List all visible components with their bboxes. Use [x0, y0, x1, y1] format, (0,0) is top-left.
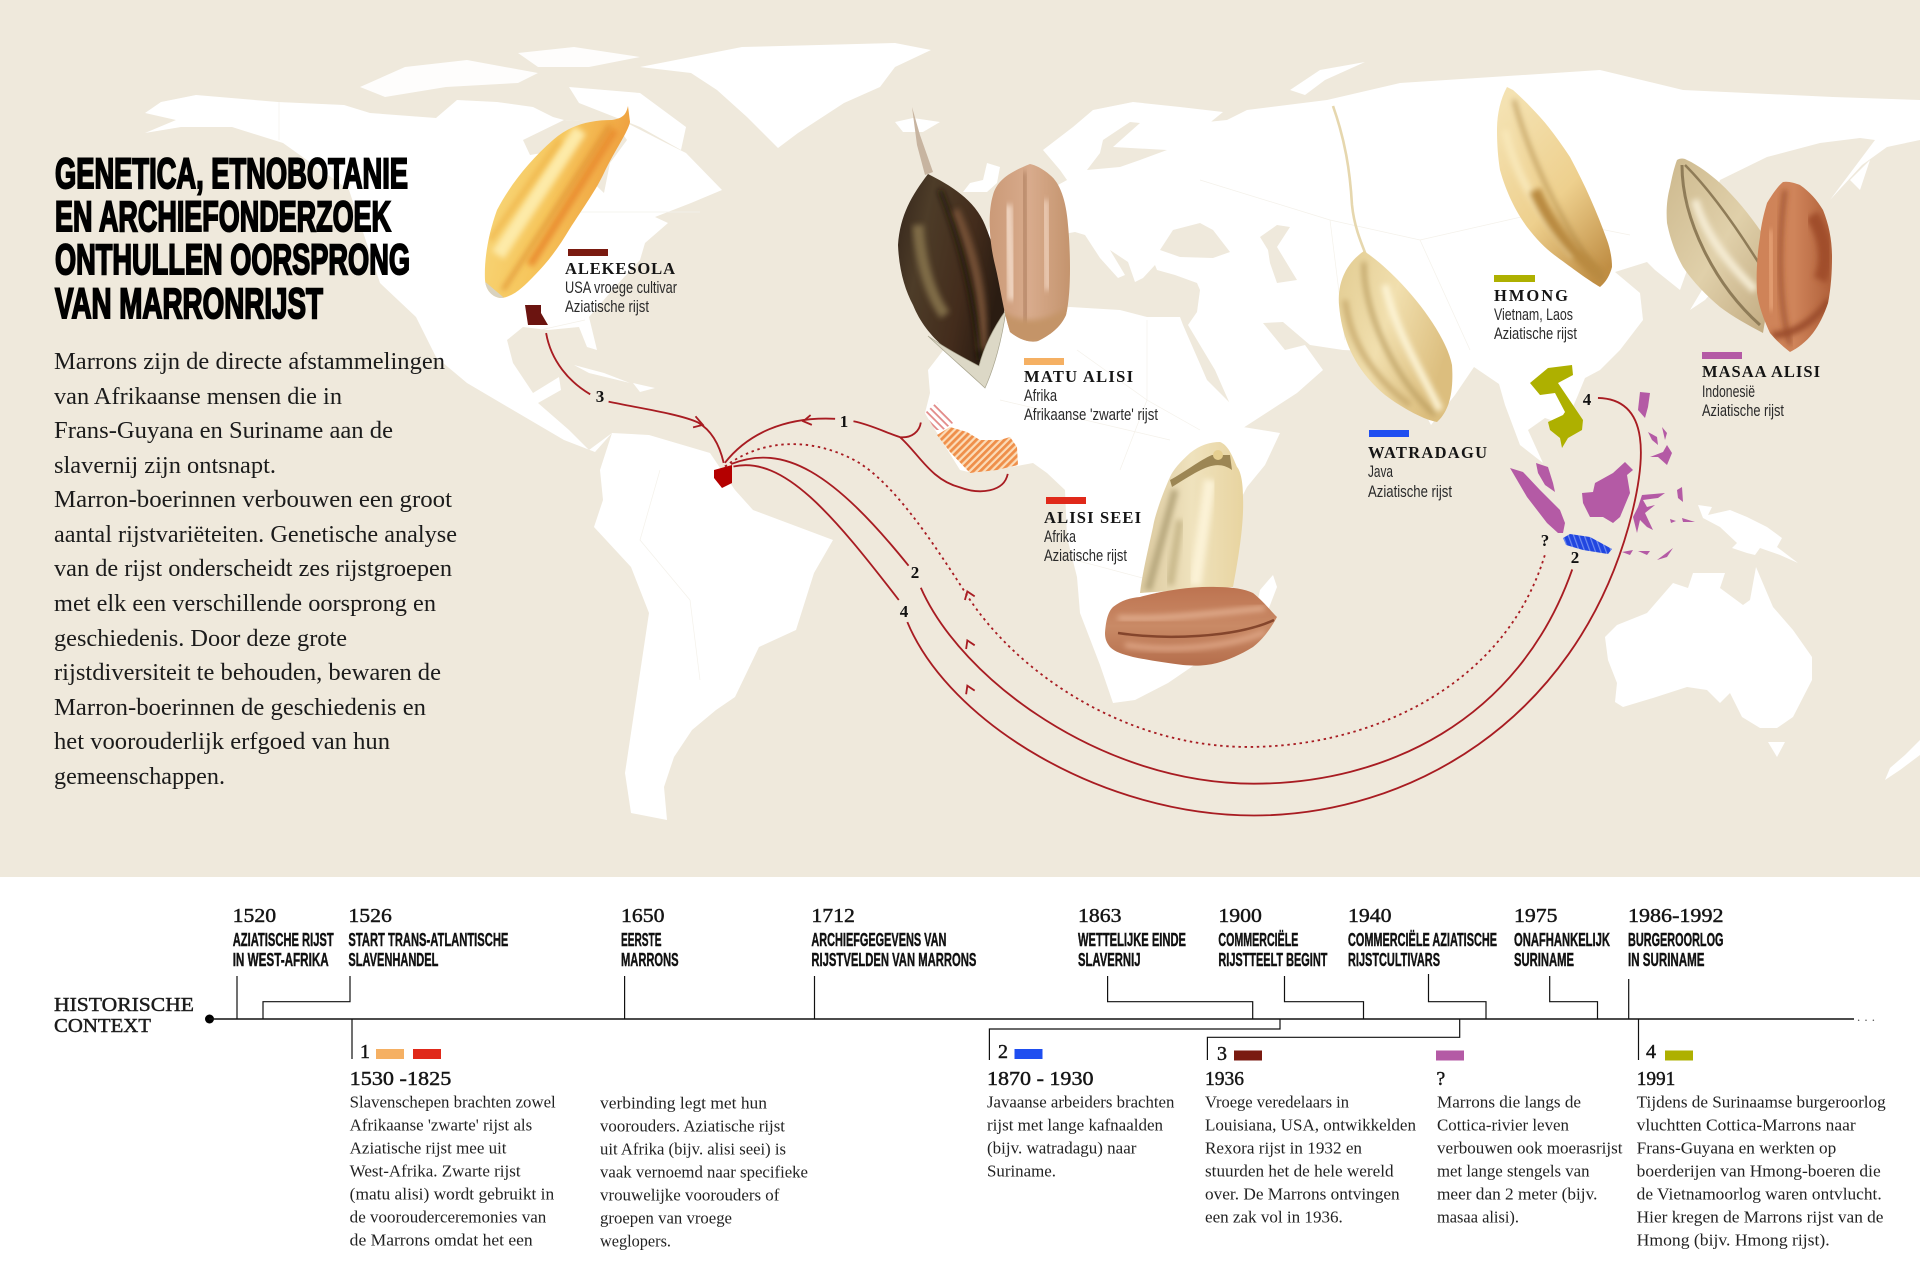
detail 1: 1530-1825: Slavenschepen brachten zowel	[350, 1093, 556, 1112]
event 1863: SLAVERNIJ	[1078, 949, 1140, 970]
intro text: Marron-boerinnen de geschiedenis en	[54, 694, 426, 721]
British Isles	[963, 163, 1000, 192]
title: GENETICA, ETNOBOTANIE	[55, 150, 408, 198]
detail 4: 1991: vluchtten Cottica-Marrons naar	[1637, 1116, 1856, 1135]
intro text: slavernij zijn ontsnapt.	[54, 452, 276, 479]
label: hmong	[1494, 275, 1577, 343]
detail 3: 1936: Louisiana, USA, ontwikkelden	[1205, 1116, 1417, 1135]
New Zealand	[1885, 740, 1920, 780]
region: Java	[1563, 534, 1612, 554]
event 1863: WETTELIJKE EINDE	[1078, 929, 1186, 950]
label: alisi seei: Aziatische rijst	[1044, 547, 1127, 565]
title: EN ARCHIEFONDERZOEK	[55, 193, 391, 241]
intro text: geschiedenis. Door deze grote	[54, 625, 347, 652]
event 1712: ARCHIEFGEGEVENS VAN	[811, 929, 946, 950]
rice grain: alisi seei red	[1105, 587, 1277, 666]
timeline	[54, 905, 1886, 1251]
intro text: met elk een verschillende oorsprong en	[54, 590, 436, 617]
label: alekesola: Aziatische rijst	[565, 298, 649, 316]
event 1975: 1975	[1514, 905, 1558, 927]
Eurasian inland seas	[1087, 122, 1297, 283]
detail: unknown date: ?	[1436, 1068, 1445, 1090]
Greenland	[640, 43, 931, 148]
detail 3: 1936: een zak vol in 1936.	[1205, 1208, 1343, 1227]
detail 4: 1991: Hmong (bijv. Hmong rijst).	[1637, 1231, 1830, 1250]
intro text: aantal rijstvariëteiten. Genetische analyse	[54, 521, 457, 548]
detail: unknown date: meer dan 2 meter (bijv.	[1437, 1185, 1597, 1204]
Australia	[1605, 567, 1812, 728]
label: hmong: Aziatische rijst	[1494, 325, 1577, 343]
route number labels: 2	[1571, 548, 1579, 567]
event 1940	[1348, 905, 1497, 970]
detail 1 second column: groepen van vroege	[600, 1209, 732, 1228]
event 1650: MARRONS	[621, 949, 679, 970]
route number labels	[596, 387, 1592, 621]
detail 1 second column: verbinding legt met hun	[600, 1094, 768, 1113]
detail 1 second column: vrouwelijke voorouders of	[600, 1186, 780, 1205]
detail 4: 1991: boerderijen van Hmong-boeren die	[1637, 1162, 1881, 1181]
detail 4: 1991: de Vietnamoorlog waren ontvlucht.	[1637, 1185, 1882, 1204]
rice grain: matu alisi brown	[990, 164, 1072, 345]
event 1863	[1078, 905, 1186, 970]
route 1	[725, 415, 1008, 491]
rice grain: hmong	[1497, 87, 1612, 287]
detail 1 second column	[600, 1094, 808, 1251]
detail 4: 1991: 1991	[1637, 1068, 1675, 1090]
route number labels: 3	[596, 387, 604, 406]
label: alekesola	[565, 249, 677, 316]
label: matu alisi: Afrikaanse 'zwarte' rijst	[1024, 406, 1158, 424]
event 1986-1992: BURGEROORLOG	[1628, 929, 1724, 950]
label: alisi seei: Afrika	[1044, 528, 1077, 546]
detail 2: 1870-1930	[987, 1041, 1175, 1181]
route dotted	[725, 444, 1545, 747]
intro text: het voorouderlijk erfgoed van hun	[54, 728, 390, 755]
intro text: gemeenschappen.	[54, 763, 225, 790]
timeline axis: ...	[1857, 1009, 1875, 1024]
event 1900: COMMERCIËLE	[1218, 929, 1298, 950]
label: masaa alisi: Aziatische rijst	[1702, 402, 1784, 420]
event 1712: RIJSTVELDEN VAN MARRONS	[811, 949, 976, 970]
highlighted regions	[525, 305, 1695, 561]
intro text: rijstdiversiteit te behouden, bewaren de	[54, 659, 441, 686]
detail 1 second column: vaak vernoemd naar specifieke	[600, 1163, 808, 1182]
route number labels: 2	[911, 563, 919, 582]
detail 2: 1870-1930: 2	[998, 1041, 1008, 1063]
detail 1 second column: uit Afrika (bijv. alisi seei) is	[600, 1140, 786, 1159]
label: masaa alisi: Indonesië	[1702, 383, 1755, 401]
route 3	[546, 333, 724, 463]
region: Vietnam	[1530, 365, 1583, 448]
detail 3: 1936: 1936	[1205, 1068, 1244, 1090]
migration routes	[546, 333, 1641, 816]
event 1986-1992: IN SURINAME	[1628, 949, 1704, 970]
route number labels: 4	[900, 602, 909, 621]
rice grain: masaa alisi tan	[1667, 158, 1775, 333]
detail 3: 1936: over. De Marrons ontvingen	[1205, 1185, 1400, 1204]
timeline heading: CONTEXT	[54, 1015, 151, 1037]
event 1526: 1526	[348, 905, 392, 927]
detail 2: 1870-1930: (bijv. watradagu) naar	[987, 1139, 1137, 1158]
intro text	[54, 348, 457, 790]
detail 2: 1870-1930: 1870 - 1930	[987, 1068, 1094, 1090]
event 1650	[621, 905, 679, 970]
rice grain: masaa alisi red	[1757, 182, 1832, 352]
Cuba and Hispaniola	[574, 365, 655, 392]
detail 1: 1530-1825: 1530 -1825	[350, 1068, 451, 1090]
intro text: Marrons zijn de directe afstammelingen	[54, 348, 445, 375]
label: matu alisi: Afrika	[1024, 387, 1058, 405]
route number labels: 4	[1583, 390, 1592, 409]
detail 1: 1530-1825: 1	[360, 1041, 370, 1063]
title	[55, 150, 410, 328]
rice grain: watradagu	[1333, 106, 1452, 422]
detail 3: 1936	[1205, 1043, 1417, 1227]
detail 2: 1870-1930: Javaanse arbeiders brachten	[987, 1093, 1175, 1112]
Japan	[1690, 160, 1870, 310]
route 4	[733, 398, 1641, 816]
detail 3: 1936: Vroege veredelaars in	[1205, 1093, 1350, 1112]
event 1650: EERSTE	[621, 929, 662, 950]
detail 4: 1991: 4	[1646, 1041, 1656, 1063]
detail: unknown date: Marrons die langs de	[1437, 1093, 1581, 1112]
intro text: Marron-boerinnen verbouwen een groot	[54, 486, 452, 513]
detail 4: 1991	[1637, 1041, 1886, 1250]
event 1900: 1900	[1218, 905, 1262, 927]
rice grain: alekesola	[482, 106, 630, 302]
event 1986-1992: 1986-1992	[1628, 905, 1724, 927]
detail 4: 1991: Hier kregen de Marrons rijst van de	[1637, 1208, 1884, 1227]
event 1975: ONAFHANKELIJK	[1514, 929, 1610, 950]
label: watradagu: Java	[1368, 463, 1394, 481]
region: Suriname	[714, 465, 732, 488]
detail: unknown date: verbouwen ook moerasrijst	[1437, 1139, 1623, 1158]
Tasmania	[1768, 742, 1785, 757]
intro text: van Afrikaanse mensen die in	[54, 383, 342, 410]
timeline axis	[205, 1009, 1875, 1024]
Madagascar	[1255, 575, 1277, 613]
event 1975: SURINAME	[1514, 949, 1574, 970]
event 1712	[811, 905, 976, 970]
label: hmong: HMONG	[1494, 286, 1568, 305]
detail 1 second column: weglopers.	[600, 1232, 671, 1251]
detail: unknown date	[1436, 1050, 1623, 1227]
event 1863: 1863	[1078, 905, 1122, 927]
route number labels: ?	[1541, 531, 1549, 550]
event 1975	[1514, 905, 1610, 970]
detail 4: 1991: Frans-Guyana en werkten op	[1637, 1139, 1836, 1158]
detail 1: 1530-1825: Afrikaanse 'zwarte' rijst als	[350, 1116, 532, 1135]
event 1520: IN WEST-AFRIKA	[233, 949, 329, 970]
intro text: van de rijst onderscheidt zes rijstgroepen	[54, 555, 452, 582]
region: West Africa orange hatch	[937, 427, 1018, 473]
Arctic islands	[360, 47, 686, 150]
route 2	[731, 458, 1572, 784]
detail 1: 1530-1825: de Marrons omdat het een	[350, 1231, 533, 1250]
detail 4: 1991: Tijdens de Surinaamse burgeroorlog	[1637, 1093, 1886, 1112]
title: VAN MARRONRIJST	[55, 280, 323, 328]
detail 3: 1936: Rexora rijst in 1932 en	[1205, 1139, 1363, 1158]
Novaya Zemlya	[1290, 62, 1365, 95]
region: West Africa pink hatch	[925, 402, 953, 430]
event 1900: RIJSTTEELT BEGINT	[1218, 949, 1328, 970]
Hudson Bay	[523, 120, 627, 193]
event 1940: 1940	[1348, 905, 1392, 927]
label: hmong: Vietnam, Laos	[1494, 306, 1573, 324]
event 1940: RIJSTCULTIVARS	[1348, 949, 1440, 970]
detail 2: 1870-1930: Suriname.	[987, 1162, 1056, 1181]
rice grain: alisi seei cream	[1140, 442, 1243, 593]
connectors below axis	[352, 1019, 1638, 1060]
route number labels: 1	[840, 412, 848, 431]
label: alekesola: USA vroege cultivar	[565, 279, 677, 297]
timeline heading: HISTORISCHE	[54, 994, 194, 1016]
event 1520: AZIATISCHE RIJST	[233, 929, 334, 950]
event 1900	[1218, 905, 1328, 970]
detail 1: 1530-1825: de voorouderceremonies van	[350, 1208, 547, 1227]
event 1526	[348, 905, 508, 970]
map panel background	[0, 0, 1920, 877]
label: masaa alisi: MASAA ALISI	[1702, 362, 1820, 381]
event 1940: COMMERCIËLE AZIATISCHE	[1348, 929, 1497, 950]
region: Indonesia and Philippines	[1510, 392, 1695, 561]
world map	[145, 43, 1920, 820]
Africa	[925, 307, 1280, 703]
detail 1: 1530-1825	[350, 1041, 808, 1251]
detail 1: 1530-1825: Aziatische rijst mee uit	[350, 1139, 507, 1158]
label: matu alisi	[1024, 358, 1158, 424]
detail 3: 1936: stuurden het de hele wereld	[1205, 1162, 1394, 1181]
timeline heading	[54, 994, 194, 1037]
Iceland	[895, 118, 940, 132]
New Guinea	[1698, 505, 1798, 563]
label: alisi seei	[1044, 497, 1141, 565]
label: watradagu: Aziatische rijst	[1368, 483, 1452, 501]
title: ONTHULLEN OORSPRONG	[55, 236, 410, 284]
event 1650: 1650	[621, 905, 664, 927]
intro text: Frans-Guyana en Suriname aan de	[54, 417, 393, 444]
label: alisi seei: ALISI SEEI	[1044, 508, 1141, 527]
label: matu alisi: MATU ALISI	[1024, 367, 1133, 386]
event 1526: SLAVENHANDEL	[348, 949, 438, 970]
South America	[594, 433, 833, 820]
detail: unknown date: masaa alisi).	[1437, 1208, 1519, 1227]
label: watradagu: WATRADAGU	[1368, 443, 1487, 462]
detail: unknown date: Cottica-rivier leven	[1437, 1116, 1570, 1135]
connectors above axis	[237, 974, 1629, 1019]
label: alekesola: ALEKESOLA	[565, 259, 675, 278]
detail 1 second column: voorouders. Aziatische rijst	[600, 1117, 785, 1136]
Eurasia	[965, 70, 1920, 463]
event 1520	[233, 905, 334, 970]
faint country borders	[279, 102, 1630, 680]
detail: unknown date: met lange stengels van	[1437, 1162, 1590, 1181]
North America	[145, 95, 722, 452]
event 1712: 1712	[811, 905, 855, 927]
label: watradagu	[1368, 430, 1487, 501]
detail 3: 1936: 3	[1217, 1043, 1227, 1065]
region: Louisiana	[525, 305, 548, 325]
detail 1: 1530-1825: (matu alisi) wordt gebruikt in	[350, 1185, 555, 1204]
rice grain: matu alisi black	[898, 107, 1006, 388]
detail 2: 1870-1930: rijst met lange kafnaalden	[987, 1116, 1164, 1135]
event 1526: START TRANS-ATLANTISCHE	[348, 929, 508, 950]
event 1986-1992	[1628, 905, 1724, 970]
label: masaa alisi	[1702, 352, 1820, 420]
detail 1: 1530-1825: West-Afrika. Zwarte rijst	[350, 1162, 521, 1181]
event 1520: 1520	[233, 905, 276, 927]
